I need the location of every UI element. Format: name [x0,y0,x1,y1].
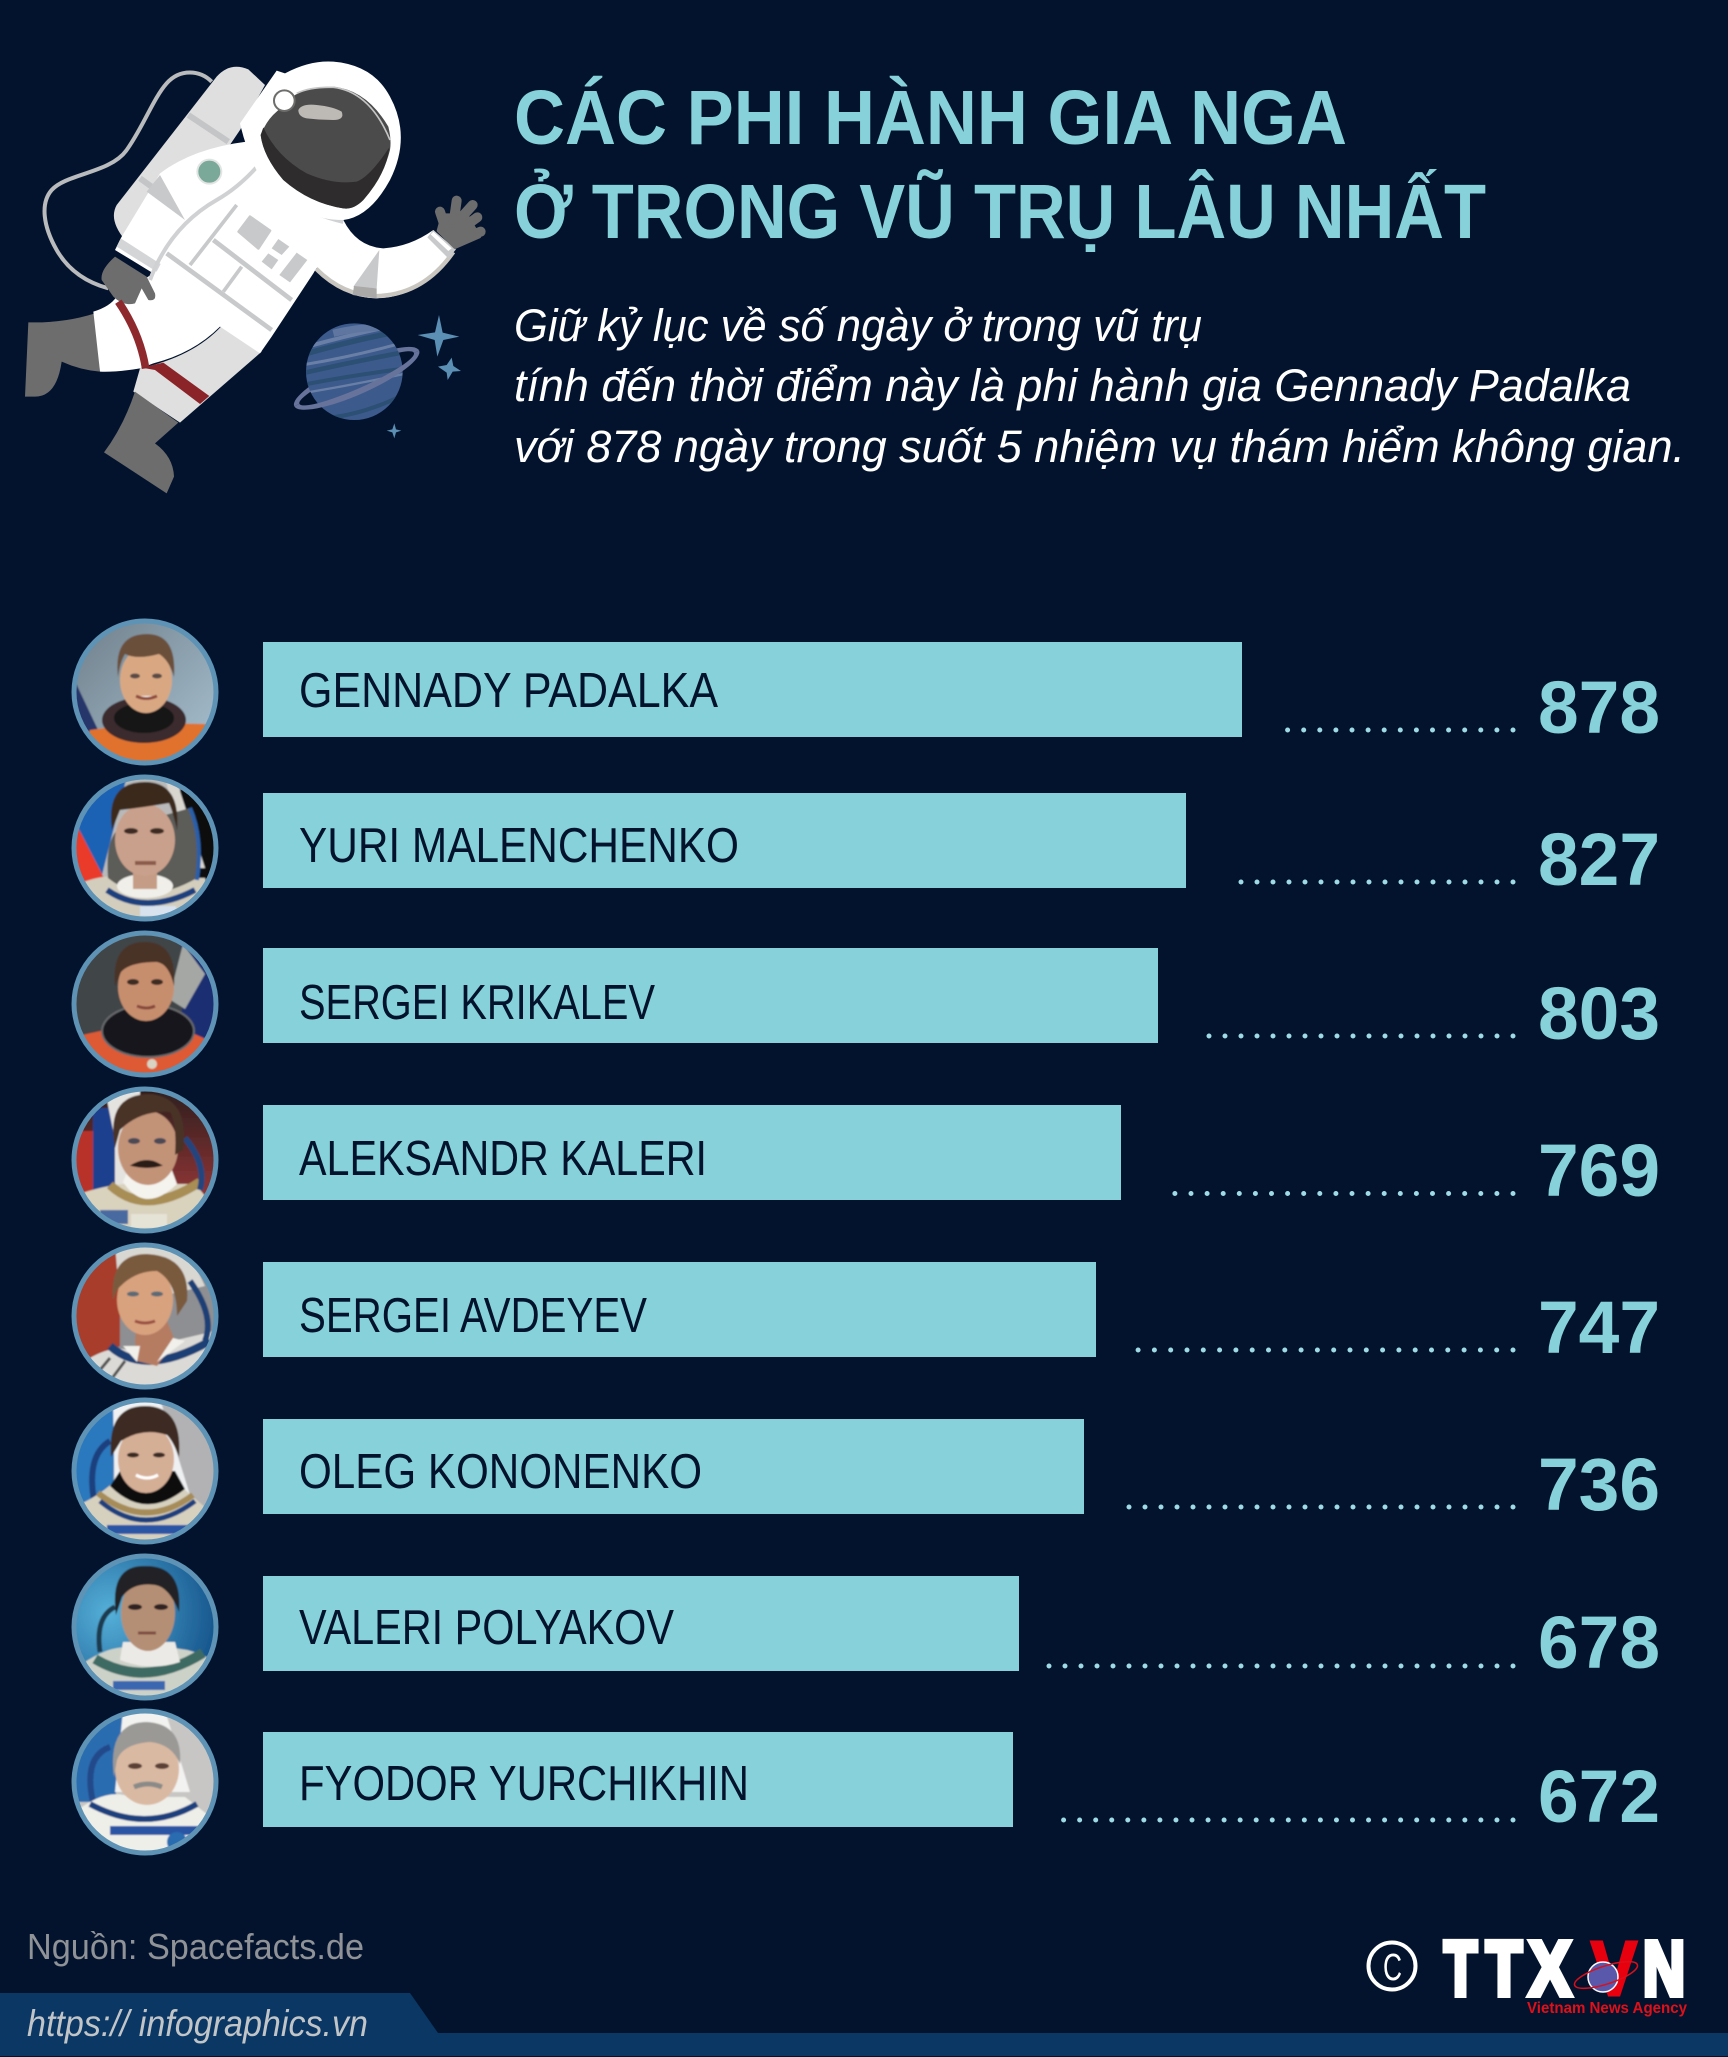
globe [1572,1956,1640,1994]
row: Yuri Malenchenko [263,793,1660,901]
portrait: Sergei Krikalev [73,932,217,1076]
TTXVN logo: Vietnam News Agency [1527,2000,1687,2017]
title: Ở TRONG VŨ TRỤ LÂU NHẤT [514,167,1486,255]
torso [93,142,343,372]
row: Gennady Padalka: GENNADY PADALKA [299,664,718,718]
copyright symbol: C [1383,1947,1402,1989]
row: Fyodor Yurchikhin: 672 [1538,1755,1660,1838]
portrait: Aleksandr Kaleri [73,1088,217,1232]
illustration: astronaut and planet [25,61,481,493]
website link: https:// infographics.vn [27,2003,368,2044]
subtitle: với 878 ngày trong suốt 5 nhiệm vụ thám hiểm không gian. [514,421,1685,472]
portrait: Valeri Polyakov [73,1555,217,1699]
row: Aleksandr Kaleri: 769 [1538,1129,1660,1212]
hand glove [438,201,481,247]
TTXVN logo [1444,1926,1687,2017]
helmet [240,61,401,220]
suit details [117,163,343,330]
footer banner [0,1993,1728,2056]
row: Sergei Avdeyev [263,1262,1660,1369]
row: Sergei Krikalev [263,948,1660,1055]
TTXVN logo: X [1529,1926,1571,2012]
portrait: Gennady Padalka [73,620,217,764]
right boot [104,392,178,493]
TTXVN logo: T [1444,1926,1477,2012]
visor [261,87,391,209]
copyright symbol [1368,1942,1416,1990]
row: Oleg Kononenko: 736 [1538,1443,1660,1526]
row: Sergei Avdeyev: 747 [1538,1286,1660,1369]
title [514,74,1486,255]
row: Valeri Polyakov: VALERI POLYAKOV [299,1601,674,1655]
row: Sergei Avdeyev: SERGEI AVDEYEV [299,1289,647,1343]
TTXVN logo: V [1591,1926,1637,2012]
row: Valeri Polyakov: 678 [1538,1601,1660,1684]
row: Oleg Kononenko [263,1419,1660,1526]
red straps [118,302,146,368]
row: Yuri Malenchenko: YURI MALENCHENKO [299,819,739,873]
left boot [25,313,100,397]
portrait: Oleg Kononenko [70,1399,217,1543]
bar chart: days in space per cosmonaut [263,642,1660,1838]
subtitle: tính đến thời điểm này là phi hành gia Gennady Padalka [514,360,1631,411]
row: Valeri Polyakov [263,1576,1660,1684]
mission patch [197,160,221,184]
row: Gennady Padalka: 878 [1538,666,1660,749]
row: Sergei Krikalev: 803 [1538,972,1660,1055]
source note: Nguồn: Spacefacts.de [27,1926,364,1967]
lower leg [133,326,262,423]
row: Aleksandr Kaleri: ALEKSANDR KALERI [299,1132,707,1186]
TTXVN logo: T [1486,1926,1522,2012]
waist glove [101,257,155,304]
arm [315,220,456,298]
row: Yuri Malenchenko: 827 [1538,818,1660,901]
tether [45,72,212,288]
row: Sergei Krikalev: SERGEI KRIKALEV [299,976,655,1030]
row: Oleg Kononenko: OLEG KONONENKO [299,1445,702,1499]
portrait: Sergei Avdeyev [73,1244,217,1388]
portrait: Fyodor Yurchikhin [70,1710,217,1854]
planet [288,315,461,438]
backpack [114,67,265,253]
subtitle: Giữ kỷ lục về số ngày ở trong vũ trụ [514,300,1202,351]
portrait: Yuri Malenchenko [73,776,217,920]
row: Fyodor Yurchikhin: FYODOR YURCHIKHIN [299,1757,749,1811]
subtitle [514,300,1685,472]
TTXVN logo: N [1643,1926,1685,2012]
title: CÁC PHI HÀNH GIA NGA [514,74,1347,161]
row: Gennady Padalka [263,642,1660,749]
row: Fyodor Yurchikhin [263,1732,1660,1838]
row: Aleksandr Kaleri [263,1105,1660,1212]
